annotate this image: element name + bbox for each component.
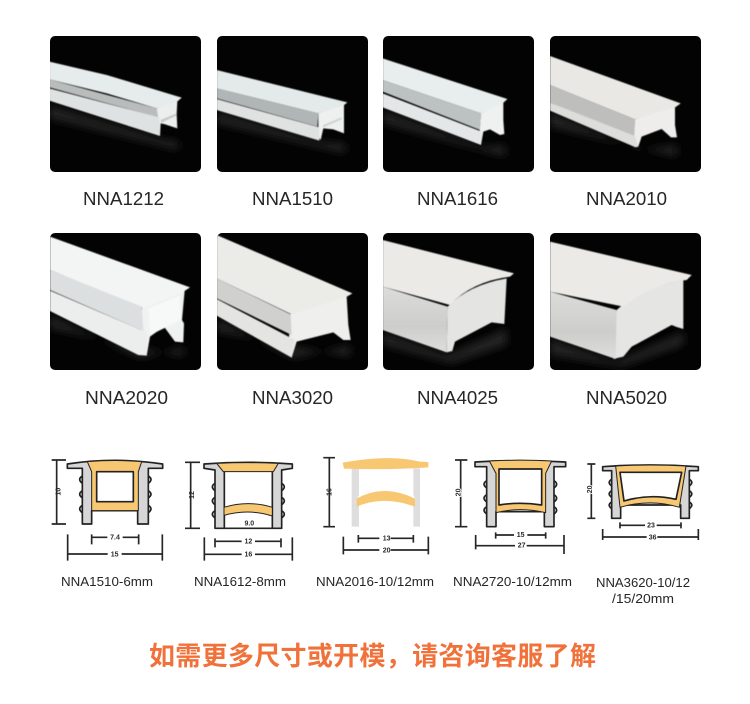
label: NNA4025: NNA4025 [417,388,498,408]
label: NNA3020: NNA3020 [252,388,333,408]
diagram: NNA2016 cross-section: 13 [383,535,391,542]
diagram: NNA3620 cross-section: 23 [647,523,655,530]
infographic canvas [50,36,701,669]
diagram: NNA2016 cross-section: 20 [383,547,391,554]
diagram: NNA2016 cross-section: 16 [327,488,334,496]
photo: NNA1616 profile [383,36,534,172]
label: NNA2016-10/12mm: NNA2016-10/12mm [316,574,434,589]
diagram: NNA1612 cross-section: 12 [244,539,252,546]
diagram: NNA2720 cross-section: 27 [518,543,526,550]
label: NNA3620-10/12/15/20mm: /15/20mm [612,591,674,606]
label: NNA2020: NNA2020 [85,388,168,408]
label: NNA1616: NNA1616 [417,189,498,209]
photo: NNA5020 profile [550,233,701,370]
diagram: NNA3620 cross-section: 36 [649,534,657,541]
diagram: NNA2720 cross-section [455,460,566,554]
diagram: NNA1510 cross-section: 7.4 [110,535,120,542]
label: NNA5020: NNA5020 [586,388,667,408]
label: NNA2010: NNA2010 [586,189,667,209]
diagram: NNA1612 cross-section: 16 [244,552,252,559]
diagram: NNA1612 cross-section: 12 [189,491,196,499]
label: NNA1510-6mm: NNA1510-6mm [61,574,153,589]
diagram: NNA3620 cross-section [587,464,698,541]
diagram: NNA1612 cross-section [185,462,292,561]
diagram: NNA3620 cross-section: 20 [587,485,594,493]
label: NNA1510: NNA1510 [252,189,333,209]
diagram: NNA1612 cross-section: 9.0 [244,521,254,528]
photo: NNA2010 profile [550,36,701,172]
photo: NNA1212 profile [49,36,201,172]
label: NNA3620-10/12/15/20mm [596,575,690,606]
diagram: NNA2720 cross-section: 15 [517,532,525,539]
diagram: NNA1510 cross-section [52,460,163,561]
label: NNA1612-8mm: NNA1612-8mm [194,574,286,589]
diagram: NNA2720 cross-section: 20 [456,488,463,496]
diagram: NNA1510 cross-section: 15 [111,551,119,558]
diagram: NNA2016 cross-section [323,458,428,554]
label: NNA1212: NNA1212 [83,189,164,209]
photo: NNA1510 profile [217,36,368,172]
photo: NNA2020 profile [50,233,201,370]
diagram: NNA1510 cross-section: 10 [56,488,63,496]
label: NNA3620-10/12/15/20mm: NNA3620-10/12 [596,575,690,590]
photo: NNA3020 profile [217,233,368,370]
footer call to action: 如需更多尺寸或开模，请咨询客服了解 [149,641,596,671]
photo: NNA4025 profile [383,233,534,370]
label: NNA2720-10/12mm: NNA2720-10/12mm [453,574,572,589]
